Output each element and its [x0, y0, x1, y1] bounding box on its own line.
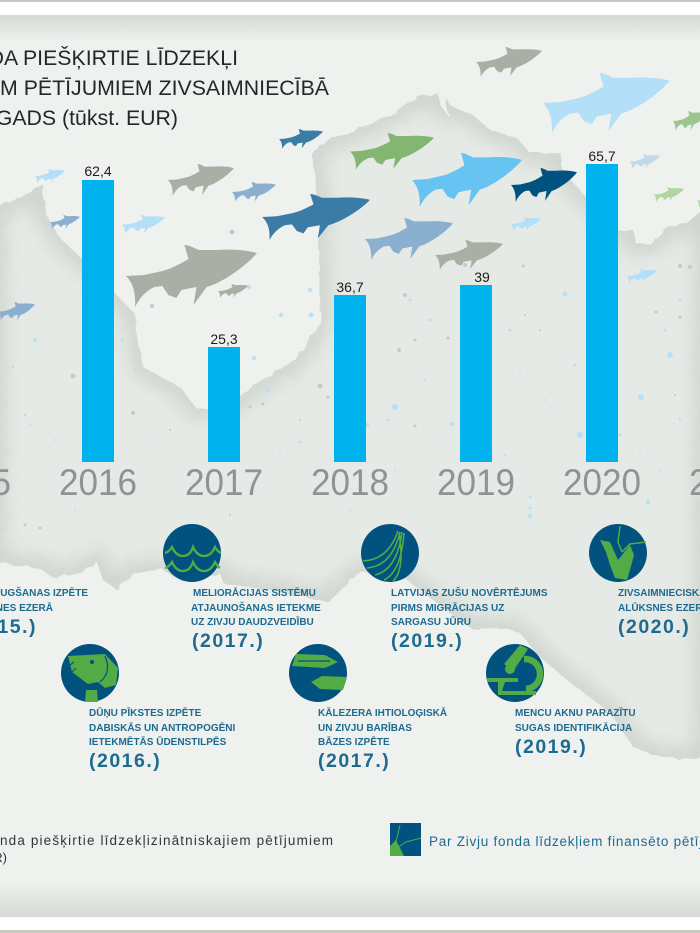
bar 2020: 65,7 [588, 148, 616, 164]
project: 2015 cropped: UGŠANAS IZPĒTE [0, 586, 88, 599]
project: cod liver 2019: MENCU AKNU PARAZĪTU [515, 707, 636, 719]
fish: pale blue large [543, 73, 670, 133]
fish: grey top [476, 47, 542, 77]
project: Alūksne lake 2020 [618, 587, 700, 638]
fish: large grey [126, 245, 257, 307]
project: Dūņu pīkste 2016: (2016.) [89, 750, 161, 772]
project: eels 2019: SARGASU JŪRU [391, 616, 471, 628]
bar 2016 [59, 163, 137, 503]
bar 2016: 62,4 [84, 163, 112, 179]
project: cod liver 2019 [515, 707, 636, 758]
project: melioration 2017: UZ ZIVJU DAUDZVEIDĪBU [191, 616, 314, 628]
project: Kālezers 2017 [318, 707, 447, 772]
fish: green [350, 133, 434, 170]
fish: green right [673, 111, 700, 131]
title: M PĒTĪJUMIEM ZIVSAIMNIECĪBĀ [0, 76, 330, 100]
legend: funds text: nda piešķirtie līdzekļizinātniskajiem pētījumiem [0, 833, 333, 848]
bar 2018: 36,7 [336, 279, 364, 295]
title: GADS (tūkst. EUR) [0, 106, 178, 130]
fish: grey [168, 164, 234, 196]
bar 2019 [437, 269, 515, 503]
project: 2015 cropped [0, 586, 88, 638]
fish shoal [0, 47, 700, 321]
legend: research icon [390, 823, 421, 856]
icon: lake map [589, 524, 647, 582]
fish: pale blue right [627, 269, 657, 283]
background land map [0, 93, 700, 758]
bar 2020 [563, 148, 641, 503]
bar 2017: 2017 [185, 462, 263, 503]
project: melioration 2017: ATJAUNOŠANAS IETEKME [191, 601, 321, 614]
fish: pale green edge [697, 193, 700, 208]
project: cod liver 2019: SUGAS IDENTIFIKĀCIJA [515, 722, 632, 734]
icon: shrimp [61, 644, 119, 702]
project: Dūņu pīkste 2016 [89, 707, 236, 772]
fish: steel large [262, 194, 370, 240]
project: Kālezers 2017: (2017.) [318, 750, 390, 772]
bar 2017: 25,3 [210, 331, 238, 347]
bar 2018 [311, 279, 389, 503]
bar 2019: 2019 [437, 462, 515, 503]
project: eels 2019: LATVIJAS ZUŠU NOVĒRTĒJUMS [391, 586, 548, 599]
legend: funds text [0, 833, 333, 865]
fish: mid blue [232, 182, 276, 202]
bar 2016: 2016 [59, 462, 137, 503]
project: Kālezers 2017: BĀZES IZPĒTE [318, 736, 390, 748]
project: melioration 2017 [191, 587, 321, 652]
bar 2018: 2018 [311, 462, 389, 503]
project: eels 2019: PIRMS MIGRĀCIJAS UZ [391, 602, 504, 614]
fish: pale steel [630, 154, 660, 169]
project: Dūņu pīkste 2016: DŪŅU PĪKSTES IZPĒTE [89, 707, 202, 719]
bar 2017 [185, 331, 263, 503]
fish: pale green [654, 187, 684, 202]
fish: sky blue [412, 153, 522, 207]
bar chart [0, 148, 700, 503]
project: eels 2019: (2019.) [391, 630, 463, 652]
fish: pale blue centre [511, 217, 541, 231]
project: eels 2019 [391, 586, 548, 652]
fish: mid blue large [365, 218, 453, 260]
icon: fishing net [361, 524, 419, 582]
project: cod liver 2019: (2019.) [515, 736, 587, 758]
fish: small grey [218, 284, 248, 298]
fish: mid blue left [50, 215, 80, 229]
icon: microscope [486, 644, 544, 702]
icon: fish and food [289, 644, 347, 702]
fish: mid blue far left [0, 302, 35, 321]
fish: pale blue left [35, 169, 65, 183]
bar 2019: 39 [474, 269, 490, 285]
fish: navy [511, 168, 577, 202]
project: Dūņu pīkste 2016: IETEKMĒTĀS ŪDENSTILPĒS [89, 736, 227, 748]
project: melioration 2017: MELIORĀCIJAS SISTĒMU [193, 587, 316, 599]
project: Kālezers 2017: UN ZIVJU BARĪBAS [318, 722, 412, 734]
fish: pale blue [122, 215, 165, 234]
project: melioration 2017: (2017.) [192, 630, 264, 652]
project: Alūksne lake 2020: (2020.) [618, 616, 690, 638]
fish: steel small [279, 129, 323, 149]
bar 2020: 2020 [563, 462, 641, 503]
project: Kālezers 2017: KĀLEZERA IHTIOLOĢISKĀ [318, 707, 447, 719]
icon: water waves [163, 524, 221, 582]
title [0, 45, 330, 130]
fish: grey centre [435, 240, 503, 270]
project: Dūņu pīkste 2016: DABISKĀS UN ANTROPOGĒNI [89, 722, 236, 734]
